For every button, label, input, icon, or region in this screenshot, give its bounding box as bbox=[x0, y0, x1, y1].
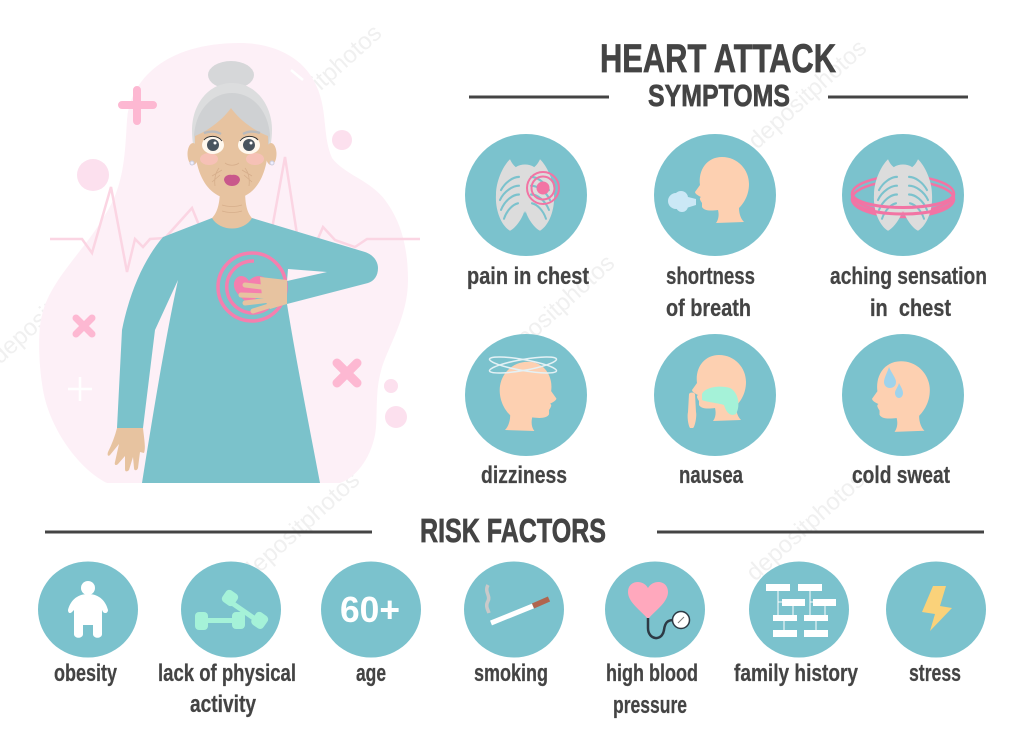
symptom: cold sweat: cold sweat bbox=[852, 462, 950, 489]
title: HEART ATTACK bbox=[600, 37, 836, 81]
pink background blob bbox=[39, 43, 408, 483]
mouth bbox=[224, 175, 240, 186]
risk: high blood pressure: pressure bbox=[613, 692, 687, 719]
hand on chest bbox=[241, 277, 287, 311]
risk: stress bbox=[886, 562, 986, 687]
decorative plus and cross marks bbox=[76, 90, 357, 383]
risk: high blood pressure bbox=[605, 562, 705, 719]
risk: obesity bbox=[38, 562, 138, 687]
symptom: shortness of breath: shortness bbox=[666, 263, 755, 290]
heart with rings bbox=[218, 253, 286, 321]
eyes bbox=[202, 136, 260, 154]
risk: age: 60+ bbox=[340, 589, 400, 630]
faint watermark: depositphotos bbox=[743, 34, 872, 154]
faint watermark: depositphotos bbox=[741, 466, 870, 586]
symptom: pain in chest: pain in chest bbox=[467, 263, 589, 290]
risk: smoking: smoking bbox=[474, 660, 548, 687]
ears bbox=[188, 143, 198, 165]
symptom: pain in chest bbox=[465, 134, 589, 290]
risk: stress: stress bbox=[909, 660, 961, 687]
risk: lack of physical activity: lack of physical bbox=[158, 660, 296, 687]
risk: family history bbox=[734, 562, 859, 687]
symptom: shortness of breath: of breath bbox=[666, 295, 751, 322]
gap between arm and body bbox=[287, 269, 327, 281]
risk: family history: family history bbox=[734, 660, 859, 687]
risk: lack of physical activity: activity bbox=[190, 691, 257, 718]
symptom: nausea bbox=[654, 334, 776, 489]
symptom: dizziness: dizziness bbox=[481, 462, 567, 489]
risk: smoking bbox=[464, 562, 564, 687]
subtitle with rules bbox=[469, 78, 968, 113]
hair bun bbox=[208, 61, 254, 89]
symptom: dizziness bbox=[465, 334, 587, 489]
symptom: shortness of breath bbox=[654, 134, 776, 322]
ecg line bbox=[50, 157, 420, 273]
risk: age: age bbox=[356, 660, 386, 687]
symptom: nausea: nausea bbox=[679, 462, 743, 489]
symptom: cold sweat bbox=[842, 334, 964, 489]
faint watermark: depositphotos bbox=[491, 249, 620, 369]
decorative circles bbox=[77, 130, 407, 428]
hair bbox=[192, 83, 272, 160]
symptom: aching sensation in chest: aching sensation bbox=[830, 263, 987, 290]
face bbox=[195, 108, 268, 199]
risk: obesity: obesity bbox=[54, 660, 117, 687]
lower hand bbox=[108, 428, 145, 471]
illustration: woman having heart attack bbox=[39, 43, 420, 483]
subtitle with rules: SYMPTOMS bbox=[648, 78, 790, 113]
faint watermark: depositphotos bbox=[258, 19, 387, 139]
dress bbox=[117, 218, 378, 483]
faint watermark: depositphotos bbox=[236, 466, 365, 586]
risk factors heading bbox=[45, 512, 984, 549]
risk: high blood pressure: high blood bbox=[606, 660, 698, 687]
eyebrows bbox=[204, 132, 260, 134]
nose and wrinkles bbox=[212, 163, 252, 186]
neck bbox=[210, 188, 254, 229]
risk: lack of physical activity bbox=[158, 562, 296, 718]
faint watermark bbox=[0, 19, 872, 586]
risk: age bbox=[321, 562, 421, 687]
cheeks bbox=[200, 153, 218, 165]
symptom: aching sensation in chest: in chest bbox=[870, 295, 951, 322]
symptom: aching sensation in chest bbox=[830, 134, 987, 322]
risk factors heading: RISK FACTORS bbox=[420, 512, 606, 549]
